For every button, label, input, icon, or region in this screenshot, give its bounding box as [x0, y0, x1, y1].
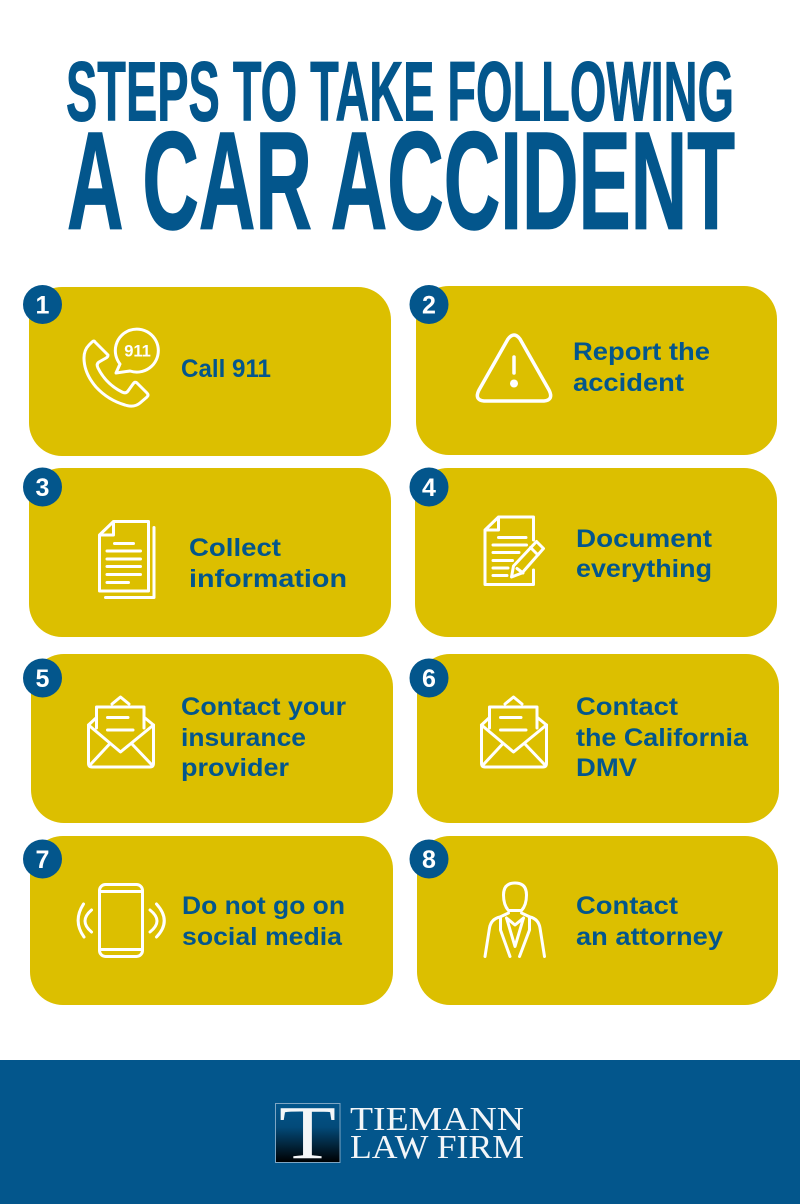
footer band	[0, 1060, 800, 1204]
badge: number 7: 7	[36, 846, 49, 874]
badge: number 1	[23, 285, 62, 324]
icon: open envelope with letter	[482, 697, 546, 767]
badge: number 3	[23, 468, 62, 506]
badge: number 7	[23, 840, 62, 878]
step text: Collect	[189, 534, 282, 562]
badge: number 6	[410, 658, 448, 698]
step text: Contact	[576, 892, 679, 920]
panel: step 7 do not go on social media	[23, 836, 393, 1005]
step text: Do not go on	[182, 892, 345, 920]
step text: Report the	[573, 338, 710, 366]
badge: number 2	[410, 285, 448, 324]
panel: step 2 report the accident	[410, 285, 777, 455]
badge: number 1: 1	[36, 292, 50, 320]
logo wordmark: LAW FIRM	[350, 1129, 524, 1166]
step text: accident	[573, 369, 685, 397]
panel: step 8 contact an attorney	[410, 836, 778, 1005]
badge: number 8: 8	[422, 846, 436, 874]
badge: number 2: 2	[422, 292, 436, 320]
badge: number 5: 5	[36, 665, 50, 693]
logo: Tiemann Law Firm	[276, 1092, 524, 1176]
logo wordmark	[350, 1101, 524, 1166]
badge: number 5	[23, 658, 62, 698]
panel: step 4 document everything	[410, 468, 777, 637]
icon: document with pencil	[485, 517, 544, 584]
badge: number 4: 4	[422, 474, 436, 502]
step text: the California	[576, 724, 749, 752]
icon: open envelope with letter	[88, 697, 154, 767]
panel: step 6 contact the california dmv	[410, 654, 779, 823]
icon: vibrating smartphone	[78, 884, 164, 956]
step text: DMV	[576, 754, 637, 782]
step text	[181, 693, 346, 782]
step text: insurance	[181, 724, 306, 752]
step text: Contact	[576, 693, 679, 721]
step text	[576, 525, 713, 583]
panel: step 5 contact your insurance provider	[23, 654, 393, 823]
step text: everything	[576, 555, 712, 583]
badge: number 6: 6	[422, 665, 436, 693]
step text: Contact your	[181, 693, 346, 721]
badge: number 4	[410, 468, 448, 506]
badge: number 3: 3	[36, 474, 49, 502]
icon: warning triangle	[477, 335, 551, 401]
step text: information	[189, 565, 347, 593]
step text	[573, 338, 710, 397]
step text	[576, 892, 723, 951]
icon: document stack	[100, 522, 154, 598]
panel: step 1 call 911	[23, 285, 391, 456]
step text	[576, 693, 749, 782]
logo wordmark: TIEMANN	[350, 1101, 524, 1138]
icon: attorney in suit	[485, 883, 544, 956]
logo mark: T	[279, 1092, 336, 1176]
step text: Document	[576, 525, 713, 553]
step text: social media	[182, 923, 343, 951]
step text: an attorney	[576, 923, 723, 951]
badge: number 8	[410, 840, 448, 878]
icon: phone with 911 speech bubble: 911	[124, 342, 151, 360]
title	[66, 45, 735, 259]
panel: step 3 collect information	[23, 468, 391, 637]
icon: phone with 911 speech bubble	[84, 329, 158, 406]
step text: provider	[181, 754, 289, 782]
step text: Call 911	[181, 355, 271, 383]
step text	[189, 534, 347, 593]
step text	[182, 892, 345, 951]
